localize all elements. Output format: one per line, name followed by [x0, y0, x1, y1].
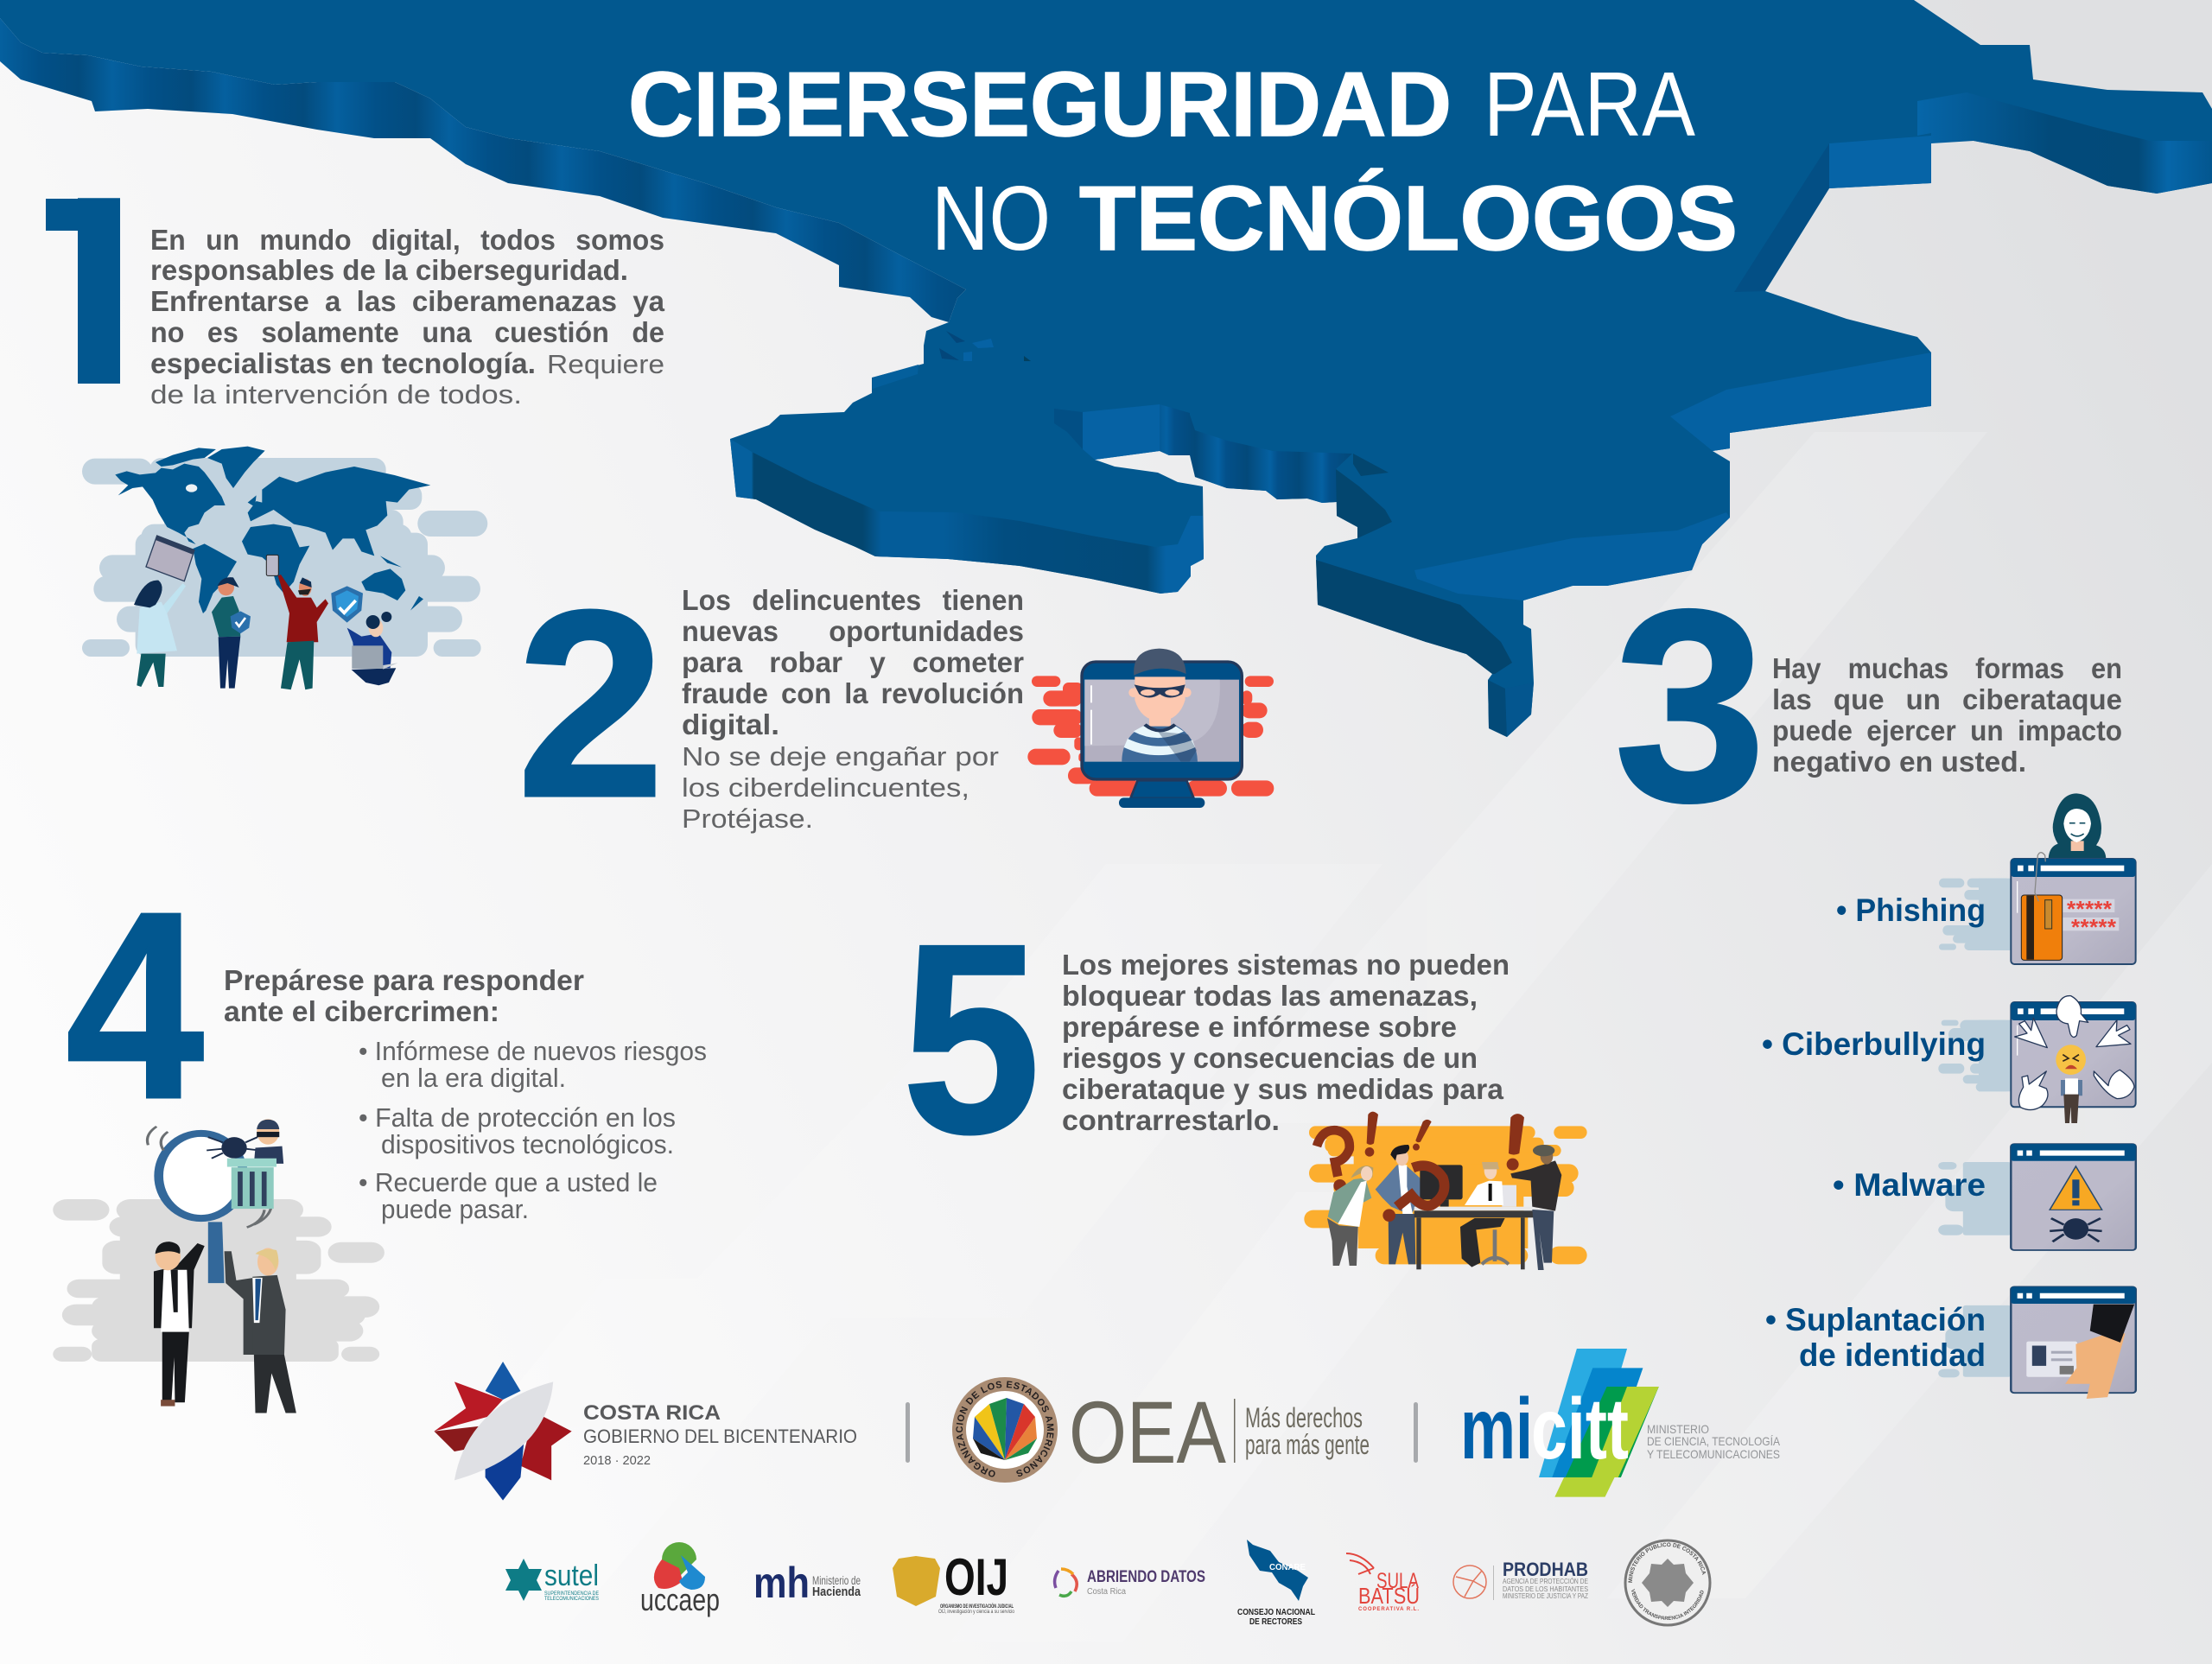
- text block 2: No se deje engañar por: [682, 741, 999, 772]
- OEA tagline: para más gente: [1245, 1429, 1370, 1460]
- seal ring: [1625, 1540, 1710, 1625]
- sula batsu wordmark: COOPERATIVA R.L.: [1358, 1607, 1419, 1612]
- micitt caption: Y TELECOMUNICACIONES: [1647, 1447, 1780, 1461]
- map side: southern land dark edge: [1316, 560, 1512, 674]
- text block 2: los ciberdelincuentes,: [682, 772, 969, 803]
- map side: southern tail dark: [1488, 680, 1507, 737]
- text block 2: para robar y cometer: [682, 646, 1024, 678]
- conare caption: CONSEJO NACIONAL: [1237, 1607, 1315, 1617]
- logo: OIJ: [893, 1548, 1015, 1615]
- text block 3: las que un ciberataque: [1772, 683, 2122, 715]
- prodhab divider and wordmark: PRODHAB: [1503, 1559, 1588, 1580]
- seal lettering: [1628, 1543, 1706, 1620]
- number 4: 4: [66, 857, 206, 1154]
- text block 2: fraude con la revolución: [682, 677, 1024, 709]
- malware icon: [1938, 1144, 2136, 1250]
- phishing label: • Phishing: [1836, 892, 1986, 928]
- text block 1: responsables de la ciberseguridad.: [150, 254, 628, 286]
- prodhab caption: DATOS DE LOS HABITANTES: [1503, 1585, 1588, 1593]
- identity theft label: de identidad: [1799, 1337, 1986, 1373]
- map silhouette: [0, 0, 2212, 737]
- map side: southern coast: [1414, 512, 1730, 600]
- text block 2: Los delincuentes tienen: [682, 584, 1024, 616]
- text block 5: [1062, 949, 1510, 1136]
- sutel star: [505, 1559, 542, 1601]
- OIJ caption: ORGANISMO DE INVESTIGACIÓN JUDICIAL: [940, 1602, 1014, 1610]
- thief figure: [1122, 649, 1198, 762]
- text block 1: especialistas en tecnología.: [150, 347, 536, 379]
- text block 2: Protéjase.: [682, 803, 813, 834]
- text block 5: bloquear todas las amenazas,: [1062, 980, 1478, 1012]
- seated figure with laptop: [347, 612, 398, 685]
- map side: central corner: [1160, 404, 1190, 455]
- number 2: 2: [517, 556, 664, 853]
- OEA tagline: [1234, 1399, 1370, 1463]
- man with grey jacket: [1376, 1145, 1421, 1264]
- bullet list: puede pasar.: [381, 1194, 529, 1224]
- map side: channel edge: [1190, 415, 1352, 503]
- mh mark: mh: [753, 1559, 810, 1607]
- abriendo datos caption: Costa Rica: [1087, 1587, 1126, 1597]
- malware label: • Malware: [1833, 1167, 1986, 1203]
- sula batsu wordmark: BATSÚ: [1358, 1583, 1420, 1609]
- prodhab divider and wordmark: [1493, 1559, 1588, 1600]
- illustration: thief in monitor: [1027, 649, 1274, 808]
- text block 5: riesgos y consecuencias de un: [1062, 1042, 1478, 1074]
- text block 1: Enfrentarse a las ciberamenazas ya: [150, 285, 665, 317]
- OIJ badge: [893, 1556, 940, 1606]
- prodhab caption: MINISTERIO DE JUSTICIA Y PAZ: [1503, 1592, 1588, 1600]
- red blobs: [1027, 676, 1274, 797]
- monitor: [1082, 662, 1242, 808]
- micitt bars: [1539, 1349, 1659, 1497]
- identity theft label: • Suplantación: [1765, 1302, 1986, 1337]
- seal lettering: MINISTERIO PÚBLICO DE COSTA RICA: [1628, 1543, 1706, 1583]
- number 5: 5: [902, 889, 1040, 1190]
- micitt wordmark: citt: [1531, 1381, 1629, 1477]
- attack type: phishing: [1836, 793, 2136, 964]
- logo: PRODHAB: [1453, 1559, 1588, 1600]
- OEA seal: ORGANIZACION DE LOS ESTADOS AMERICANOS: [956, 1381, 1054, 1477]
- micitt caption: [1647, 1422, 1781, 1461]
- number 3: 3: [1614, 553, 1766, 858]
- man right: [225, 1248, 296, 1413]
- map side: eastern block: [1829, 136, 1931, 188]
- man left: [154, 1242, 205, 1407]
- bullet list: • Recuerde que a usted le: [359, 1167, 658, 1197]
- figure with browser window: [134, 536, 194, 687]
- sula batsu wordmark: [1358, 1569, 1420, 1612]
- prodhab caption: AGENCIA DE PROTECCIÓN DE: [1503, 1577, 1588, 1585]
- text block 5: ciberataque y sus medidas para: [1062, 1073, 1504, 1105]
- title line one: PARA: [1484, 54, 1695, 156]
- section 3: [1614, 553, 2136, 1399]
- section 1: [46, 198, 665, 689]
- text block 3: puede ejercer un impacto: [1772, 715, 2122, 746]
- map side: western land mass: [730, 439, 1204, 594]
- map side: central coast light: [1083, 404, 1160, 460]
- uccaep wordmark: uccaep: [640, 1582, 720, 1617]
- sutel caption: TELECOMUNICACIONES: [544, 1596, 600, 1602]
- sula batsu bird: [1346, 1553, 1374, 1574]
- logo: SUTEL: [505, 1559, 600, 1602]
- map side: southern tail: [1505, 683, 1534, 737]
- micitt wordmark: mi: [1460, 1381, 1533, 1477]
- light blue blobs: [82, 458, 487, 657]
- map side: lower eastern coast: [1670, 352, 1931, 451]
- prodhab network icon: [1453, 1566, 1486, 1598]
- sutel wordmark: sutel: [544, 1559, 599, 1592]
- map islands: [873, 331, 1031, 389]
- spider: [207, 1137, 259, 1159]
- Costa Rica wordmark: COSTA RICA: [583, 1401, 721, 1425]
- hacienda wordmark: Ministerio de: [812, 1573, 861, 1587]
- Costa Rica wordmark: 2018 · 2022: [583, 1453, 651, 1468]
- phishing icon: [1939, 793, 2136, 964]
- map side: central coast dark: [1054, 409, 1083, 449]
- logo: Ministerio Público seal: [1624, 1540, 1711, 1626]
- logo: Gobierno del Bicentenario: [434, 1362, 857, 1501]
- map side: eastern arm: [1917, 92, 2212, 194]
- big question mark held: [1382, 1165, 1445, 1222]
- map side: inner channel: [1336, 469, 1392, 538]
- number 1: [46, 198, 120, 384]
- phishing password stars: *****: [2071, 914, 2117, 940]
- woman: [1327, 1165, 1373, 1266]
- text block 3: Hay muchas formas en: [1772, 652, 2122, 684]
- seated man: [1460, 1162, 1516, 1267]
- abriendo datos wordmark: ABRIENDO DATOS: [1087, 1568, 1205, 1586]
- desk and monitor: [1414, 1165, 1538, 1269]
- phishing password stars: [2067, 896, 2117, 940]
- map of the Americas in 3D: [0, 0, 2212, 737]
- OIJ caption: [938, 1602, 1015, 1615]
- micitt wordmark: [1460, 1381, 1629, 1477]
- text block 1: no es solamente una cuestión de: [150, 316, 664, 348]
- seal star: [1642, 1559, 1694, 1607]
- illustration: magnifier and businessmen: [53, 1119, 385, 1413]
- text block 2: digital.: [682, 708, 779, 740]
- ciberbullying icon: [1938, 996, 2136, 1123]
- sutel caption: [544, 1591, 600, 1602]
- identity theft icon: [1938, 1286, 2136, 1399]
- text block 4 heading: Prepárese para responder: [224, 964, 584, 996]
- section 2: [517, 556, 1274, 853]
- ciberbullying label: • Ciberbullying: [1762, 1026, 1986, 1062]
- uccaep icon: [654, 1542, 705, 1590]
- text block 4 heading: [224, 964, 584, 1027]
- text block 4 heading: ante el cibercrimen:: [224, 995, 499, 1027]
- illustration: team alarmed around a desk: [1304, 1112, 1587, 1270]
- illustration: world map with people: [82, 447, 487, 689]
- map shading stripe: [1734, 143, 1829, 292]
- Costa Rica wordmark: [583, 1401, 857, 1468]
- hacienda wordmark: [812, 1573, 861, 1599]
- thief peeking: [254, 1119, 283, 1164]
- prodhab caption: [1503, 1577, 1588, 1600]
- seal lettering: VERDAD TRANSPARENCIA INTEGRIDAD: [1631, 1589, 1704, 1620]
- separator: [1414, 1402, 1418, 1463]
- title line one: CIBERSEGURIDAD: [628, 54, 1452, 156]
- text block 1: Requiere: [547, 349, 664, 379]
- background facets: [285, 432, 2212, 1664]
- bullet list: en la era digital.: [381, 1063, 566, 1093]
- micitt caption: DE CIENCIA, TECNOLOGÍA: [1647, 1434, 1781, 1448]
- attack type: malware: [1833, 1144, 2136, 1250]
- logo: MICITT: [1460, 1349, 1781, 1497]
- OIJ wordmark: OIJ: [944, 1548, 1008, 1606]
- bullet list: • Falta de protección en los: [359, 1102, 676, 1133]
- text block 2: [682, 584, 1024, 834]
- map side: channel spike: [1353, 454, 1389, 476]
- bullet list: [359, 1036, 707, 1224]
- logo: Abriendo Datos: [1055, 1568, 1205, 1597]
- logo: Ministerio de Hacienda: [753, 1559, 861, 1607]
- sula batsu wordmark: SULA: [1376, 1569, 1419, 1593]
- title line two: TECNÓLOGOS: [1079, 168, 1738, 270]
- bullet list: dispositivos tecnológicos.: [381, 1129, 674, 1159]
- text block 1: [150, 224, 665, 410]
- map coast side: northern coast: [0, 18, 966, 322]
- separator: [906, 1402, 910, 1463]
- abriendo datos icon: [1055, 1569, 1077, 1596]
- identity theft label: [1765, 1302, 1986, 1373]
- text block 5: Los mejores sistemas no pueden: [1062, 949, 1510, 981]
- text block 1: En un mundo digital, todos somos: [150, 224, 664, 256]
- magnifier: [147, 1127, 271, 1283]
- conare label: CONARE: [1269, 1563, 1306, 1572]
- Costa Rica wordmark: GOBIERNO DEL BICENTENARIO: [583, 1426, 857, 1447]
- question and exclamation marks: [1317, 1112, 1524, 1192]
- hacienda wordmark: Hacienda: [812, 1585, 861, 1599]
- figure with shield: [212, 577, 251, 689]
- title line two: NO: [931, 168, 1051, 270]
- logo: CONARE: [1237, 1540, 1315, 1627]
- OEA wordmark: OEA: [1069, 1383, 1226, 1482]
- text block 1: de la intervención de todos.: [150, 379, 522, 410]
- attack type: identity theft: [1765, 1286, 2136, 1399]
- trash can: [227, 1159, 276, 1209]
- attack type: ciberbullying: [1762, 996, 2136, 1123]
- conare caption: DE RECTORES: [1249, 1616, 1302, 1627]
- text block 3: negativo en usted.: [1772, 746, 2026, 778]
- figure in red sweater with phone: [266, 555, 363, 689]
- section 5: [902, 889, 1587, 1270]
- bullet list: • Infórmese de nuevos riesgos: [359, 1036, 707, 1066]
- conare caption: [1237, 1607, 1315, 1627]
- logo: UCCAEP: [640, 1542, 720, 1617]
- OEA tagline: Más derechos: [1245, 1402, 1363, 1433]
- phishing password stars: *****: [2067, 896, 2113, 922]
- section 4: [53, 857, 707, 1413]
- text block 5: prepárese e infórmese sobre: [1062, 1011, 1457, 1043]
- logo: Sula Batsú: [1346, 1553, 1420, 1612]
- world continents: [115, 447, 430, 613]
- standing man with cap: [1510, 1145, 1561, 1270]
- grey blobs: [53, 1199, 385, 1362]
- micitt caption: MINISTERIO: [1647, 1422, 1709, 1436]
- text block 3: [1772, 652, 2122, 778]
- text block 2: nuevas oportunidades: [682, 615, 1024, 647]
- star emblem: [434, 1362, 572, 1501]
- text block 5: contrarrestarlo.: [1062, 1104, 1280, 1136]
- conare map: [1247, 1540, 1308, 1601]
- sutel caption: SUPERINTENDENCIA DE: [544, 1591, 600, 1597]
- title: [628, 54, 1738, 270]
- OIJ caption: OIJ, investigación y ciencia a su servicio: [938, 1610, 1015, 1615]
- logo: OEA: [952, 1377, 1370, 1483]
- orange blobs: [1304, 1126, 1587, 1264]
